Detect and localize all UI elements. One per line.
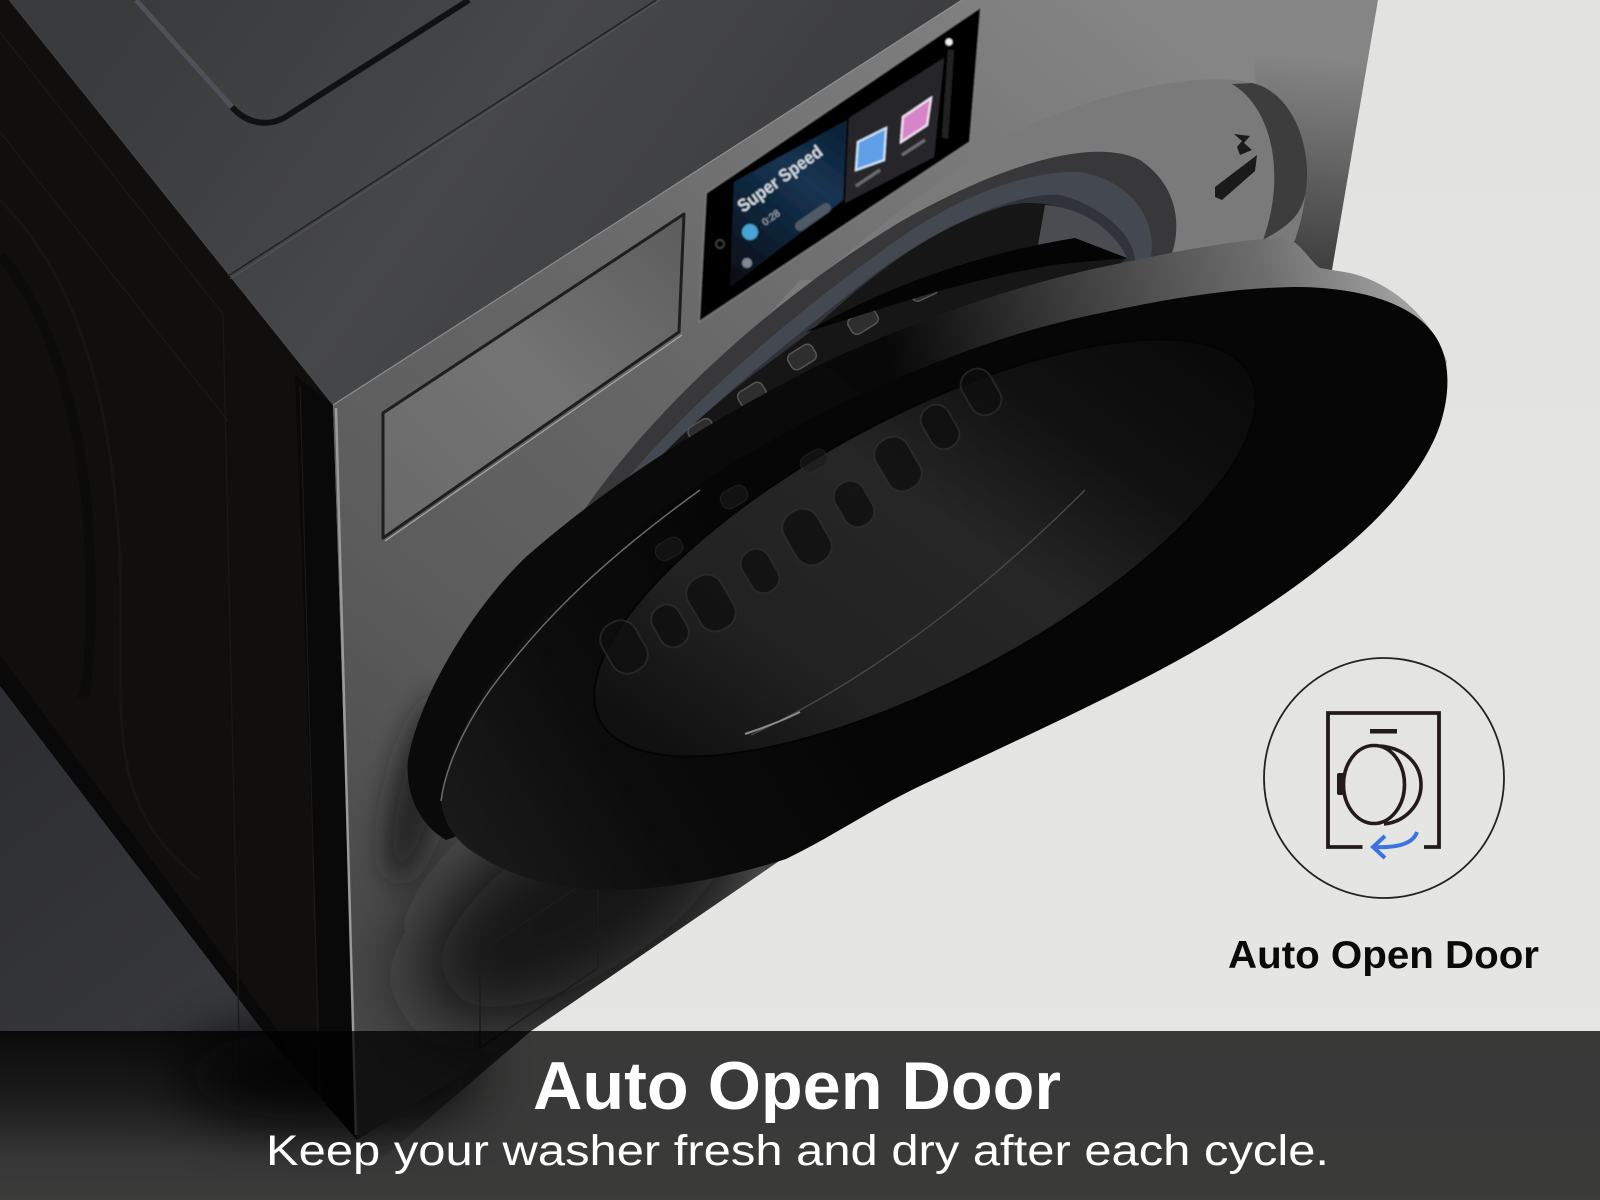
touch screen xyxy=(730,120,847,287)
door back shadow ring xyxy=(408,364,1000,840)
icon label: Auto Open Door xyxy=(1228,934,1539,977)
glass highlight xyxy=(751,490,1085,735)
door disc xyxy=(441,287,1447,890)
dark streak xyxy=(806,238,1127,332)
touch screen: Super Speed xyxy=(734,141,826,216)
bottom caption band xyxy=(0,1031,1600,1200)
lid groove xyxy=(136,0,469,123)
washer outline xyxy=(1328,713,1439,847)
app tiles panel xyxy=(845,58,944,203)
door circle xyxy=(1344,746,1421,824)
latch icon xyxy=(1215,134,1257,200)
drum reflection tiles xyxy=(594,363,1007,680)
door gasket xyxy=(571,152,1176,560)
door rim xyxy=(821,237,1447,500)
door handle xyxy=(1337,773,1344,795)
caption subheading: Keep your washer fresh and dry after each cycle. xyxy=(266,1127,1329,1175)
door xyxy=(408,237,1447,890)
door recess arch xyxy=(620,79,1307,480)
disc highlight edge xyxy=(441,490,700,801)
feature icon xyxy=(1264,658,1504,898)
washer front panel xyxy=(333,0,1378,1140)
door glass xyxy=(538,259,1312,837)
washer left side panel xyxy=(0,0,357,1140)
front vent panel xyxy=(383,214,684,541)
washer top panel xyxy=(9,0,962,405)
drum interior xyxy=(640,203,1127,500)
caption heading: Auto Open Door xyxy=(533,1048,1061,1124)
display bar xyxy=(1370,729,1397,734)
drum detail xyxy=(686,277,940,444)
control console xyxy=(699,7,981,322)
touch screen: 0:28 xyxy=(760,208,783,228)
blue arrow xyxy=(1373,832,1417,858)
floor shadow xyxy=(0,686,1600,1200)
